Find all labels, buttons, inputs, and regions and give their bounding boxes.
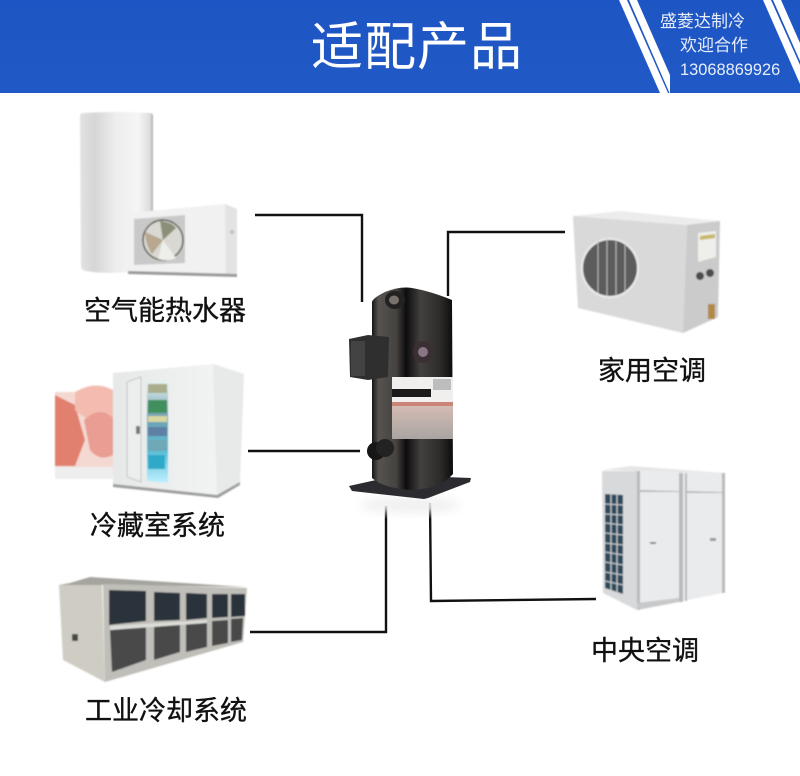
outdoor unit — [128, 204, 237, 277]
mid pipework — [110, 620, 207, 630]
body — [372, 288, 453, 490]
unit side — [683, 221, 720, 333]
contact text: 盛菱达制冷 — [660, 12, 745, 31]
label: cold room system: 冷藏室系统 — [90, 511, 225, 541]
room body — [113, 364, 244, 498]
chiller top — [59, 577, 247, 587]
front panel seams — [637, 471, 725, 610]
header banner — [0, 0, 800, 93]
connector lines — [248, 215, 596, 632]
gauges — [696, 272, 704, 280]
product: cold room system — [55, 364, 244, 498]
handles — [650, 542, 656, 544]
suction port — [367, 439, 394, 460]
control box — [72, 634, 78, 641]
water tank — [80, 112, 153, 273]
product: central air conditioner — [602, 466, 725, 610]
product: industrial chiller — [59, 577, 247, 682]
label: industrial chiller: 工业冷却系统 — [85, 696, 247, 726]
compressor — [349, 288, 471, 513]
unit side — [602, 471, 637, 610]
unit top — [573, 211, 720, 225]
shelves — [147, 381, 168, 483]
header stripes left — [619, 0, 670, 93]
contact text — [660, 12, 780, 79]
base plate — [349, 477, 471, 499]
base feet — [637, 598, 679, 610]
meat photo — [55, 385, 117, 479]
lower panels — [110, 618, 243, 672]
label: home air conditioner: 家用空调 — [598, 356, 706, 386]
title: 适配产品 — [311, 19, 523, 77]
contact text: 13068869926 — [680, 61, 780, 79]
header stripes right — [763, 0, 800, 84]
product: home air conditioner — [573, 211, 720, 333]
label: central air conditioner: 中央空调 — [591, 636, 699, 666]
chiller front frame — [103, 584, 247, 682]
unit front — [573, 216, 687, 333]
unit top — [602, 466, 725, 473]
product label — [392, 377, 453, 439]
unit front — [637, 471, 725, 610]
reflection — [360, 497, 460, 513]
valves — [708, 304, 715, 319]
label: air-source water heater: 空气能热水器 — [84, 296, 246, 326]
product: air-source water heater — [80, 112, 237, 277]
upper panels — [109, 590, 245, 625]
open door — [127, 377, 141, 482]
side panel — [698, 231, 716, 262]
terminal box — [349, 335, 389, 380]
fan — [582, 239, 638, 297]
top fitting — [385, 291, 405, 309]
side fitting — [413, 341, 433, 363]
side grille — [605, 494, 623, 594]
chiller side panel — [59, 583, 105, 682]
contact text: 欢迎合作 — [680, 36, 748, 55]
